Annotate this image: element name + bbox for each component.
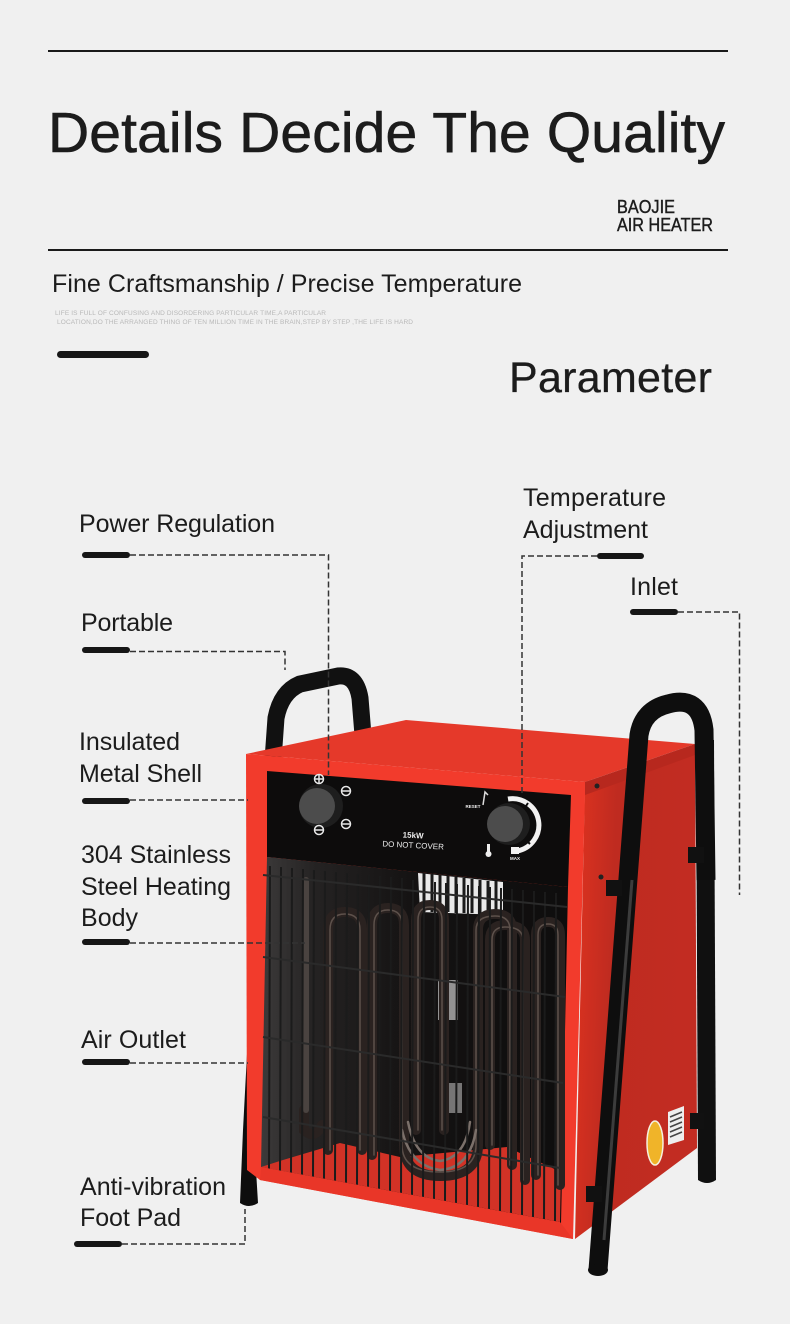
small caption: LOCATION,DO THE ARRANGED THING OF TEN MILLION TIME IN THE BRAIN,STEP BY STEP ,THE LIFE IS HARD <box>57 319 413 326</box>
callout: inlet: Inlet <box>630 573 678 601</box>
bottom tray <box>260 1167 573 1239</box>
parameter heading: Parameter <box>509 354 712 402</box>
fan guard <box>418 873 503 1113</box>
callout: inlet <box>630 573 740 895</box>
side rivets and rating stickers <box>594 784 684 1165</box>
callout: power regulation <box>79 510 328 775</box>
panel markings: MAX <box>510 856 520 861</box>
control panel <box>267 771 571 887</box>
panel markings: DO NOT COVER <box>382 839 444 852</box>
front right handle <box>586 702 706 1276</box>
callout: portable: Portable <box>81 609 173 637</box>
callout: stainless steel heating body: 304 Stainless <box>81 841 231 869</box>
back left handle <box>273 676 363 760</box>
brand label: AIR HEATER <box>617 215 713 235</box>
title: Details Decide The Quality <box>48 101 726 165</box>
callout: air outlet: Air Outlet <box>81 1026 186 1054</box>
callout: stainless steel heating body: Steel Heating <box>81 873 231 901</box>
right rear leg <box>696 740 716 1183</box>
callout: portable <box>81 609 285 670</box>
right knob <box>483 792 539 857</box>
cavity floor <box>261 1143 561 1222</box>
callout: power regulation: Power Regulation <box>79 510 275 538</box>
subtitle: Fine Craftsmanship / Precise Temperature <box>52 270 522 298</box>
small caption: LIFE IS FULL OF CONFUSING AND DISORDERING PARTICULAR TIME,A PARTICULAR <box>55 310 326 317</box>
heating cavity <box>261 857 568 1224</box>
callout: insulated metal shell: Metal Shell <box>79 760 202 788</box>
brand label: BAOJIE <box>617 197 675 217</box>
top rule <box>48 50 728 52</box>
callout: temperature adjustment: Temperature <box>523 484 666 512</box>
small caption <box>55 310 413 326</box>
callout: insulated metal shell: Insulated <box>79 728 180 756</box>
side panel <box>575 748 697 1239</box>
callout: anti-vibration foot pad <box>77 1173 245 1244</box>
callout: anti-vibration foot pad: Foot Pad <box>80 1204 181 1232</box>
callout: anti-vibration foot pad: Anti-vibration <box>80 1173 226 1201</box>
front frame <box>246 754 585 1239</box>
wire grille <box>263 866 567 1222</box>
panel markings: RESET <box>465 804 481 809</box>
top panel <box>246 720 695 782</box>
panel markings <box>382 804 520 861</box>
callout: temperature adjustment: Adjustment <box>523 516 648 544</box>
panel markings: 15kW <box>402 830 424 841</box>
accent bar <box>57 351 149 358</box>
callout: stainless steel heating body <box>81 841 305 943</box>
heating tubes <box>304 880 560 1185</box>
brand label <box>617 197 713 235</box>
callout: temperature adjustment <box>522 484 666 793</box>
left rear leg <box>240 1035 258 1206</box>
callout: insulated metal shell <box>79 728 248 801</box>
second rule <box>48 249 728 251</box>
left knob <box>299 774 350 834</box>
heater body <box>246 720 697 1239</box>
callout: stainless steel heating body: Body <box>81 904 138 932</box>
